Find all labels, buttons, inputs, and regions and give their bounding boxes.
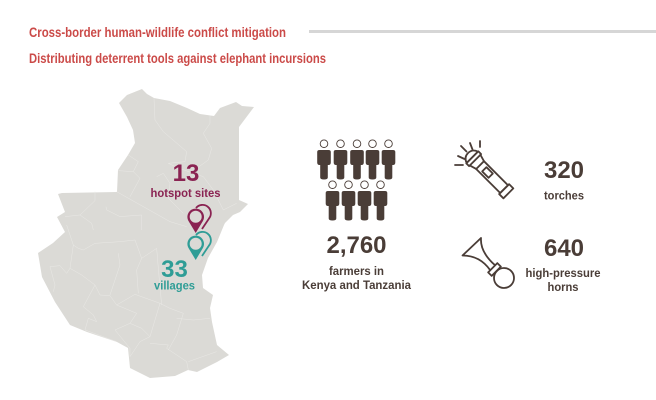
icon: village pins	[187, 232, 211, 260]
stat: 2,760 farmers	[302, 232, 412, 292]
label: 13 hotspot sites: 13	[173, 160, 199, 187]
header rule	[309, 30, 656, 33]
icon: torch	[455, 141, 514, 199]
label: 13 hotspot sites: hotspot sites	[150, 186, 221, 200]
heading: subtitle: Distributing deterrent tools against elephant incursions	[29, 50, 326, 66]
label: 33 villages: villages	[154, 278, 195, 292]
map: Kenya and Tanzania	[38, 89, 254, 378]
heading: title: Cross-border human-wildlife conflict mitigation	[29, 24, 286, 40]
icon: high-pressure horn	[462, 238, 514, 288]
stat: 2,760 farmers: Kenya and Tanzania	[302, 280, 412, 292]
stat: 2,760 farmers: 2,760	[326, 232, 387, 259]
stat: 320 torches	[544, 157, 584, 202]
icon: farmers pictogram	[317, 140, 395, 220]
label: 33 villages	[154, 256, 195, 292]
stat: 2,760 farmers: farmers in	[329, 266, 384, 278]
stat: 640 high-pressure horns	[526, 235, 600, 294]
stat: 640 high-pressure horns: high-pressure	[526, 268, 600, 280]
stat: 640 high-pressure horns: 640	[544, 235, 584, 262]
label: 33 villages: 33	[161, 256, 188, 283]
stat: 320 torches: 320	[544, 157, 584, 184]
stat: 320 torches: torches	[544, 190, 584, 202]
label: 13 hotspot sites	[150, 160, 221, 200]
stat: 640 high-pressure horns: horns	[548, 282, 578, 294]
icon: hotspot pins	[187, 205, 211, 233]
